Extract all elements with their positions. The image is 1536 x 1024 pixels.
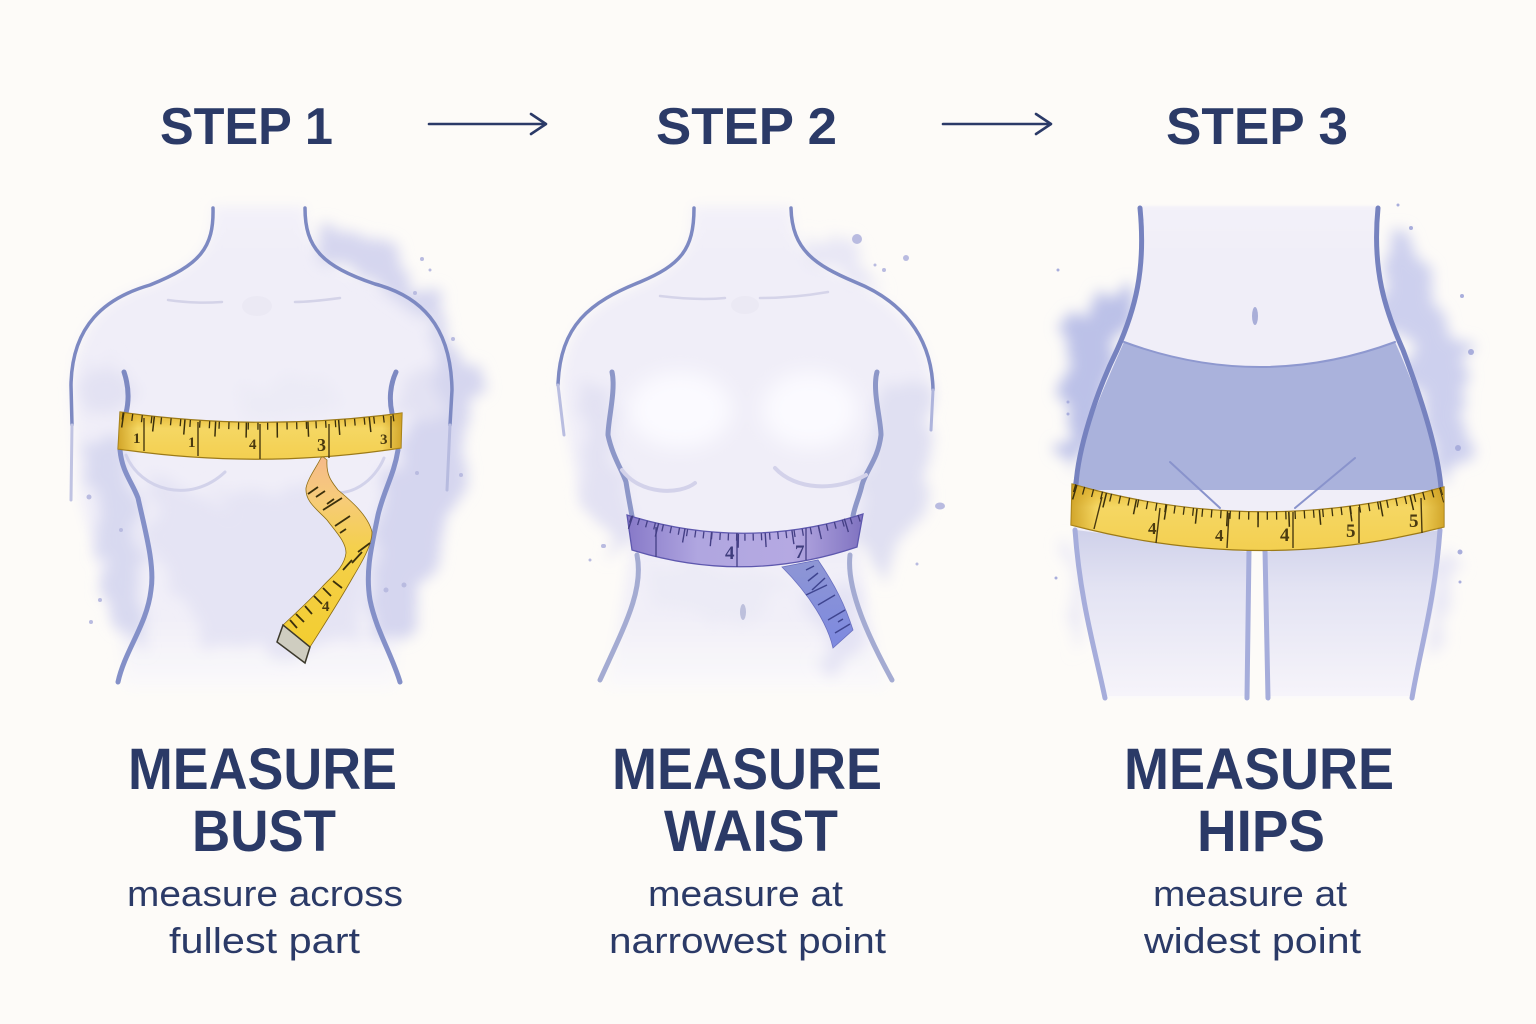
heading: step 1: STEP 1 xyxy=(160,98,333,156)
hips measuring tape: 4 xyxy=(1148,519,1157,538)
panel: step 1 bust illustration xyxy=(71,206,475,690)
waist measuring tape xyxy=(627,514,863,567)
hanging tape tail: 4 xyxy=(322,599,330,615)
caption: measure hips: widest point xyxy=(1143,920,1361,961)
shorts region xyxy=(1072,342,1442,490)
paint speckles figure 1 xyxy=(86,257,463,624)
paint speckles figure 2 xyxy=(588,234,945,566)
caption: measure hips: MEASURE xyxy=(1124,737,1394,802)
caption: measure waist: WAIST xyxy=(664,799,838,864)
figure 3 outlines xyxy=(1075,208,1441,698)
bust measuring tape xyxy=(118,412,402,459)
hanging tape tail xyxy=(277,456,372,663)
heading: step 3: STEP 3 xyxy=(1166,98,1348,156)
paint speckles figure 3 xyxy=(1054,204,1474,584)
figure 1 outlines xyxy=(71,208,452,682)
hips measuring tape: 4 xyxy=(1280,525,1290,546)
bust curves, collarbone and navel figure 2 xyxy=(622,292,866,620)
caption: measure bust: BUST xyxy=(192,799,336,864)
hips measuring tape: 5 xyxy=(1346,521,1356,542)
step headings and arrows xyxy=(160,98,1348,156)
caption: measure bust: MEASURE xyxy=(128,737,397,802)
waist measuring tape: 4 xyxy=(725,543,735,564)
bust measuring tape: 3 xyxy=(317,435,326,455)
caption: measure waist xyxy=(609,737,886,961)
waist tape tail xyxy=(782,560,853,648)
caption: measure bust xyxy=(127,737,403,961)
waist measuring tape: 7 xyxy=(795,542,805,563)
watercolor wash behind figure 3 xyxy=(1060,225,1475,660)
bust measuring tape: 1 xyxy=(188,435,196,451)
bust measuring tape: 4 xyxy=(249,437,257,453)
figure 2 body xyxy=(560,206,933,690)
hips measuring tape: 5 xyxy=(1409,511,1418,532)
caption: measure bust: fullest part xyxy=(169,920,360,961)
caption: measure bust: measure across xyxy=(127,873,403,914)
caption: measure waist: MEASURE xyxy=(612,737,882,802)
bust measuring tape: 3 xyxy=(380,432,388,448)
bust measuring tape: 1 xyxy=(133,431,140,447)
hips measuring tape xyxy=(1071,484,1444,551)
figure 2 outlines xyxy=(558,208,933,680)
arrow: step 1 to step 2 xyxy=(429,114,546,134)
figure 1 body xyxy=(72,206,450,690)
bust curves and collarbone figure 1 xyxy=(126,296,384,493)
panel: step 2 waist illustration xyxy=(558,206,945,690)
figure 3 body xyxy=(1075,206,1442,698)
watercolor wash behind figure 2 xyxy=(570,235,935,665)
hips measuring tape: 4 xyxy=(1215,526,1224,545)
caption: measure hips xyxy=(1124,737,1394,961)
panel: step 3 hips illustration xyxy=(1054,204,1475,698)
caption: measure waist: narrowest point xyxy=(609,920,886,961)
watercolor wash behind figure 1 xyxy=(80,225,475,660)
arrow: step 2 to step 3 xyxy=(943,114,1051,134)
leg shading below tape xyxy=(1076,530,1442,696)
caption: measure waist: measure at xyxy=(648,873,843,914)
caption: measure hips: measure at xyxy=(1153,873,1347,914)
caption: measure hips: HIPS xyxy=(1197,799,1325,864)
soft chest highlights figure 2 xyxy=(628,372,858,448)
heading: step 2: STEP 2 xyxy=(656,98,837,156)
